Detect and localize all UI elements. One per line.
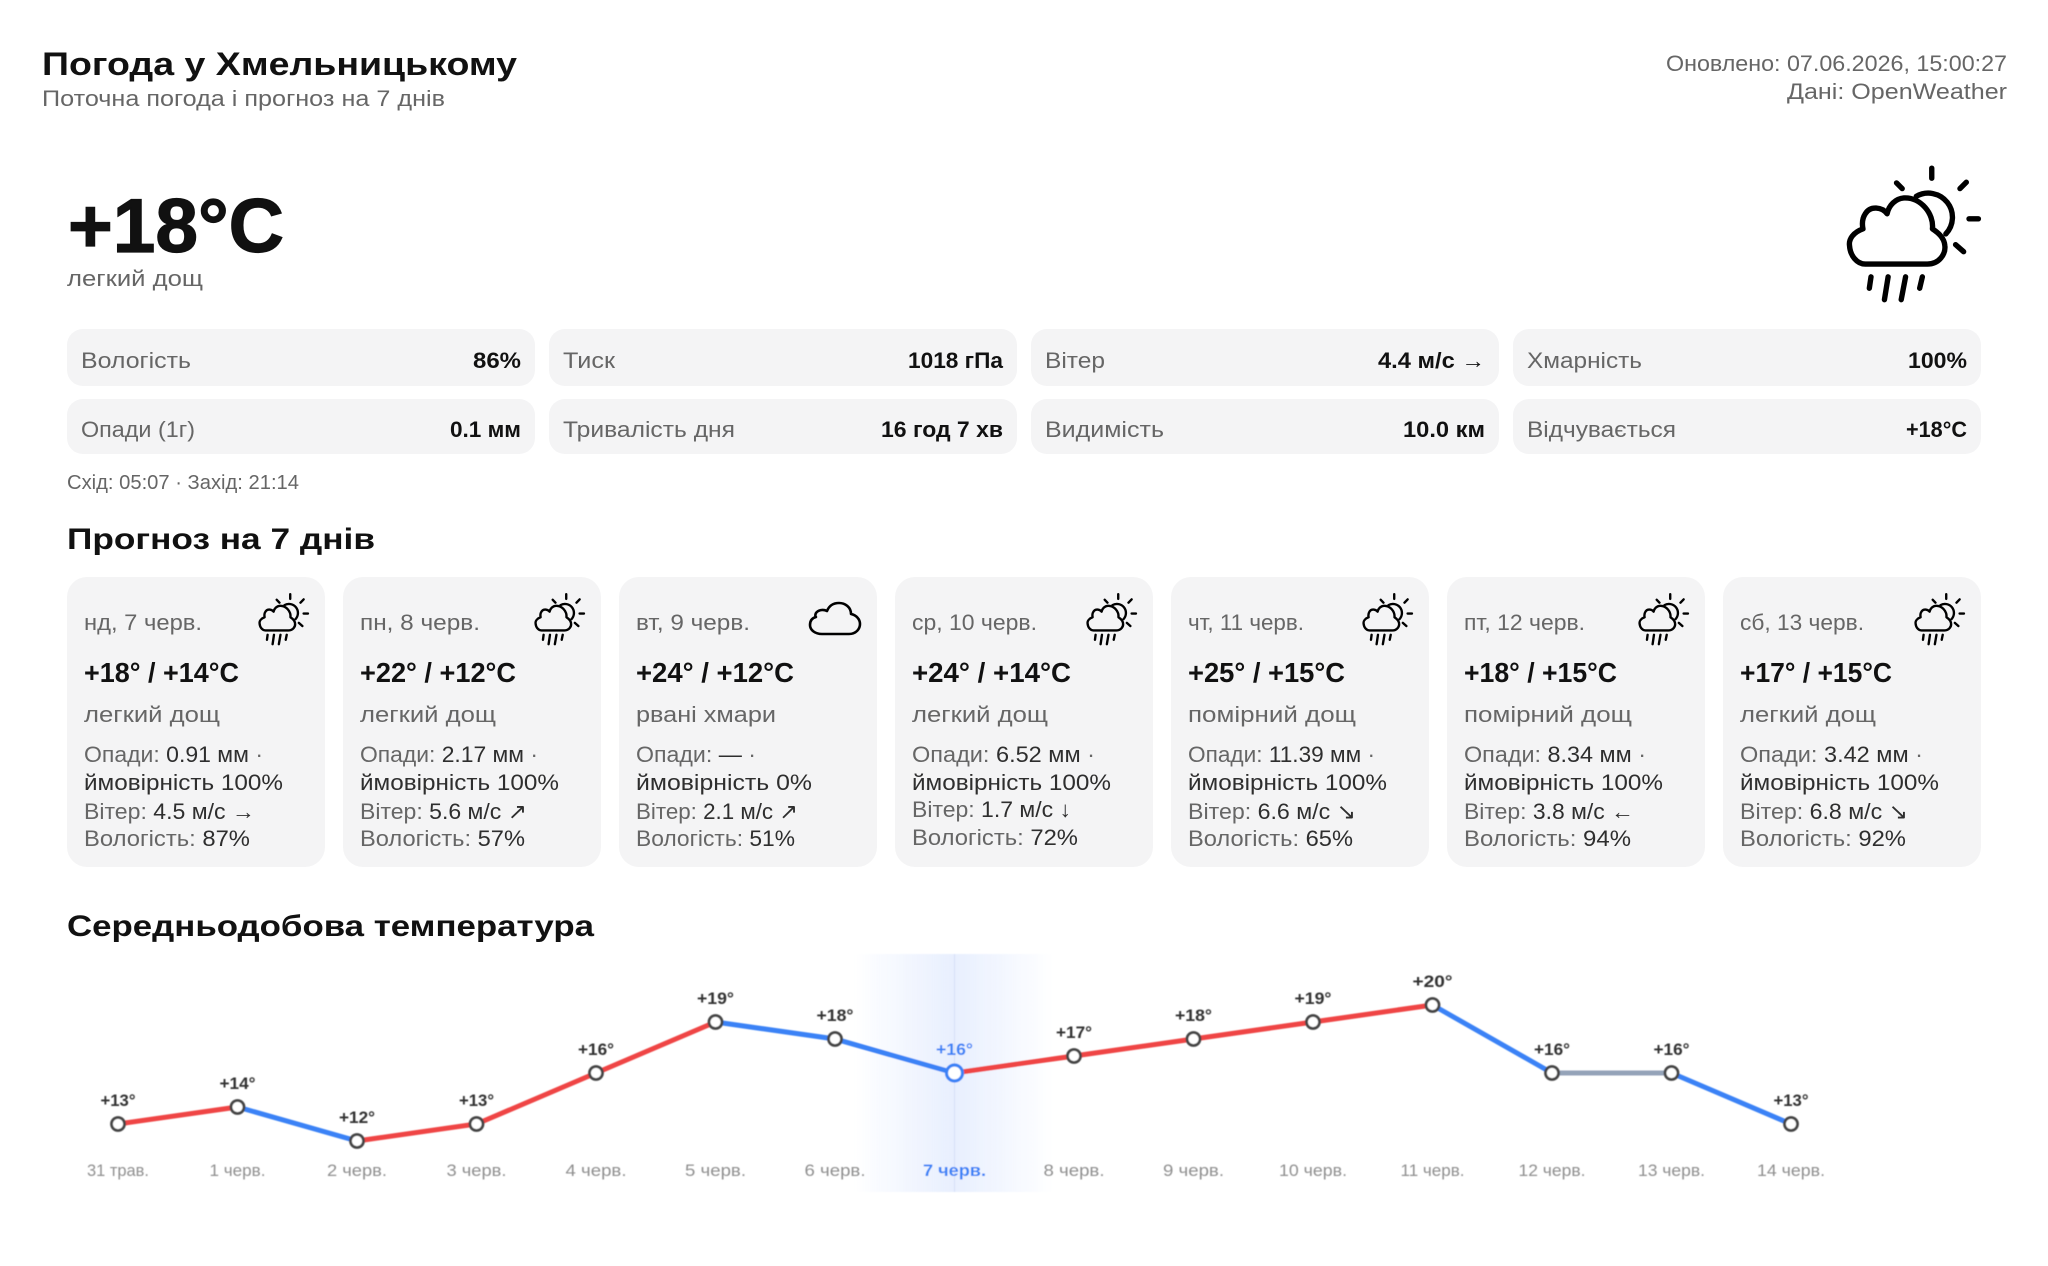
panel: forecast card 6: Вітер: 3.8 м/с ← — [1464, 799, 1634, 824]
panel: forecast card 7: Опади: 3.42 мм · — [1740, 742, 1923, 767]
date axis labels: 5 черв. — [685, 1161, 746, 1180]
panel: forecast card 6: помірний дощ — [1464, 702, 1632, 727]
panel: humidity — [67, 329, 535, 386]
icon: cloud — [810, 603, 860, 634]
heading: average daily temperature: Середньодобова температура — [67, 910, 594, 943]
panel: forecast card 4: Вітер: 1.7 м/с ↓ — [912, 797, 1071, 822]
today highlight band — [854, 954, 1054, 1192]
panel: forecast card 3: +24° / +12°C — [636, 657, 794, 688]
icon: rain cloud with sun — [1088, 594, 1136, 644]
panel: wind: 4.4 м/с → — [1378, 348, 1485, 373]
panel: pressure — [549, 329, 1017, 386]
panel: forecast card 7: легкий дощ — [1740, 702, 1876, 727]
panel: forecast card 4 — [895, 577, 1153, 867]
icon: rain cloud with sun — [536, 594, 584, 644]
temperature value labels: +16° — [1654, 1040, 1690, 1059]
date axis labels: 6 черв. — [804, 1161, 866, 1180]
panel: forecast card 5 — [1171, 577, 1429, 867]
panel: forecast card 3: рвані хмари — [636, 702, 776, 727]
temperature value labels: +18° — [816, 1006, 854, 1025]
panel: precipitation: 0.1 мм — [450, 417, 521, 442]
panel: visibility: Видимість — [1045, 417, 1164, 442]
panel: wind: Вітер — [1045, 348, 1105, 373]
panel: forecast card 2: +22° / +12°C — [360, 657, 516, 688]
panel: forecast card 6: Вологість: 94% — [1464, 826, 1631, 851]
panel: cloudiness: 100% — [1908, 348, 1967, 373]
icon: rain cloud with sun — [1640, 594, 1688, 644]
line chart: daily temperature — [87, 954, 1825, 1192]
panel: feels like: +18°C — [1906, 417, 1967, 442]
temperature value labels: +16° — [936, 1040, 973, 1059]
panel: forecast card 6: +18° / +15°C — [1464, 657, 1617, 688]
current temperature: +18°C — [68, 184, 284, 269]
panel: feels like: Відчувається — [1527, 417, 1676, 442]
temperature value labels — [100, 972, 1809, 1127]
panel: forecast card 4: ср, 10 черв. — [912, 610, 1037, 635]
panel: day length: 16 год 7 хв — [881, 417, 1003, 442]
panel: forecast card 1: легкий дощ — [84, 702, 220, 727]
temperature value labels: +16° — [578, 1040, 614, 1059]
title: Погода у Хмельницькому — [42, 46, 517, 82]
date axis labels — [87, 1161, 1825, 1180]
panel: forecast card 6: пт, 12 черв. — [1464, 610, 1585, 635]
panel: forecast card 3: Вологість: 51% — [636, 826, 795, 851]
panel: forecast card 7: Вітер: 6.8 м/с ↘ — [1740, 799, 1908, 824]
date axis labels: 3 черв. — [446, 1161, 506, 1180]
date axis labels: 2 черв. — [327, 1161, 387, 1180]
panel: forecast card 4: легкий дощ — [912, 702, 1048, 727]
date axis labels: 9 черв. — [1163, 1161, 1224, 1180]
panel: cloudiness — [1513, 329, 1981, 386]
panel: forecast card 3: Опади: — · — [636, 742, 756, 767]
panel: humidity: 86% — [473, 348, 521, 373]
panel: forecast card 6 — [1447, 577, 1705, 867]
panel: forecast card 7 — [1723, 577, 1981, 867]
panel: forecast card 2: Вологість: 57% — [360, 826, 525, 851]
panel: forecast card 7: +17° / +15°C — [1740, 657, 1892, 688]
date axis labels: 13 черв. — [1638, 1161, 1705, 1180]
panel: feels like — [1513, 399, 1981, 454]
panel: forecast card 3: вт, 9 черв. — [636, 610, 750, 635]
panel: forecast card 5: Опади: 11.39 мм · — [1188, 742, 1375, 767]
date axis labels: 7 черв. — [923, 1161, 986, 1180]
panel: wind — [1031, 329, 1499, 386]
panel: forecast card 6: Опади: 8.34 мм · — [1464, 742, 1646, 767]
panel: pressure: Тиск — [563, 348, 615, 373]
panel: forecast card 2: пн, 8 черв. — [360, 610, 480, 635]
icon: sun behind rain cloud — [1849, 168, 1978, 300]
panel: forecast card 7: сб, 13 черв. — [1740, 610, 1864, 635]
sunrise and sunset: Схід: 05:07 · Захід: 21:14 — [67, 472, 299, 494]
panel: day length — [549, 399, 1017, 454]
data source: Дані: OpenWeather — [1787, 79, 2007, 104]
panel: forecast card 1: нд, 7 черв. — [84, 610, 202, 635]
panel: forecast card 1: Вітер: 4.5 м/с → — [84, 799, 255, 824]
panel: precipitation — [67, 399, 535, 454]
date axis labels: 12 черв. — [1518, 1161, 1586, 1180]
icon: rain cloud with sun — [1364, 594, 1412, 644]
panel: forecast card 3: Вітер: 2.1 м/с ↗ — [636, 799, 798, 824]
panel: forecast card 1: Вологість: 87% — [84, 826, 250, 851]
panel: forecast card 5: Вітер: 6.6 м/с ↘ — [1188, 799, 1356, 824]
panel: forecast card 5: ймовірність 100% — [1188, 770, 1387, 795]
date axis labels: 14 черв. — [1757, 1161, 1825, 1180]
date axis labels: 4 черв. — [566, 1161, 626, 1180]
date axis labels: 31 трав. — [87, 1161, 149, 1180]
data point markers — [112, 998, 1798, 1148]
icon: rain cloud with sun — [260, 594, 308, 644]
temperature value labels: +19° — [1294, 989, 1332, 1008]
panel: forecast card 7: ймовірність 100% — [1740, 770, 1939, 795]
temperature value labels: +13° — [1774, 1091, 1809, 1110]
panel: forecast card 1: ймовірність 100% — [84, 770, 283, 795]
panel: forecast card 2 — [343, 577, 601, 867]
panel: forecast card 4: Вологість: 72% — [912, 825, 1078, 850]
temperature line segments — [118, 1005, 1791, 1141]
panel: forecast card 1 — [67, 577, 325, 867]
panel: forecast card 5: помірний дощ — [1188, 702, 1356, 727]
panel: day length: Тривалість дня — [563, 417, 735, 442]
temperature value labels: +14° — [220, 1074, 256, 1093]
panel: visibility: 10.0 км — [1403, 417, 1485, 442]
temperature value labels: +13° — [459, 1091, 494, 1110]
date axis labels: 11 черв. — [1400, 1161, 1464, 1180]
panel: forecast card 2: Опади: 2.17 мм · — [360, 742, 538, 767]
panel: forecast card 1: +18° / +14°C — [84, 657, 239, 688]
date axis labels: 1 черв. — [210, 1161, 266, 1180]
panel: forecast card 4: +24° / +14°C — [912, 657, 1071, 688]
panel: humidity: Вологість — [81, 348, 191, 373]
panel: forecast card 3 — [619, 577, 877, 867]
icon: rain cloud with sun — [1916, 594, 1964, 644]
panel: pressure: 1018 гПа — [908, 348, 1004, 373]
panel: cloudiness: Хмарність — [1527, 348, 1642, 373]
current condition: легкий дощ — [67, 266, 203, 291]
panel: forecast card 7: Вологість: 92% — [1740, 826, 1906, 851]
date axis labels: 8 черв. — [1044, 1161, 1104, 1180]
panel: precipitation: Опади (1г) — [81, 417, 195, 442]
panel: visibility — [1031, 399, 1499, 454]
panel: forecast card 5: чт, 11 черв. — [1188, 610, 1304, 635]
panel: forecast card 5: Вологість: 65% — [1188, 826, 1353, 851]
panel: forecast card 4: ймовірність 100% — [912, 770, 1111, 795]
temperature value labels: +12° — [339, 1108, 375, 1127]
temperature value labels: +17° — [1056, 1023, 1092, 1042]
date axis labels: 10 черв. — [1279, 1161, 1347, 1180]
temperature value labels: +18° — [1175, 1006, 1212, 1025]
panel: forecast card 2: ймовірність 100% — [360, 770, 559, 795]
panel: forecast card 2: легкий дощ — [360, 702, 496, 727]
temperature value labels: +13° — [100, 1091, 136, 1110]
heading: 7-day forecast: Прогноз на 7 днів — [67, 523, 375, 556]
temperature value labels: +16° — [1534, 1040, 1570, 1059]
panel: forecast card 6: ймовірність 100% — [1464, 770, 1663, 795]
updated timestamp: Оновлено: 07.06.2026, 15:00:27 — [1666, 51, 2007, 76]
panel: forecast card 2: Вітер: 5.6 м/с ↗ — [360, 799, 527, 824]
panel: forecast card 3: ймовірність 0% — [636, 770, 812, 795]
panel: forecast card 1: Опади: 0.91 мм · — [84, 742, 263, 767]
panel: forecast card 4: Опади: 6.52 мм · — [912, 742, 1095, 767]
temperature value labels: +20° — [1412, 972, 1453, 991]
subtitle: Поточна погода і прогноз на 7 днів — [42, 86, 445, 111]
temperature value labels: +19° — [697, 989, 734, 1008]
panel: forecast card 5: +25° / +15°C — [1188, 657, 1345, 688]
